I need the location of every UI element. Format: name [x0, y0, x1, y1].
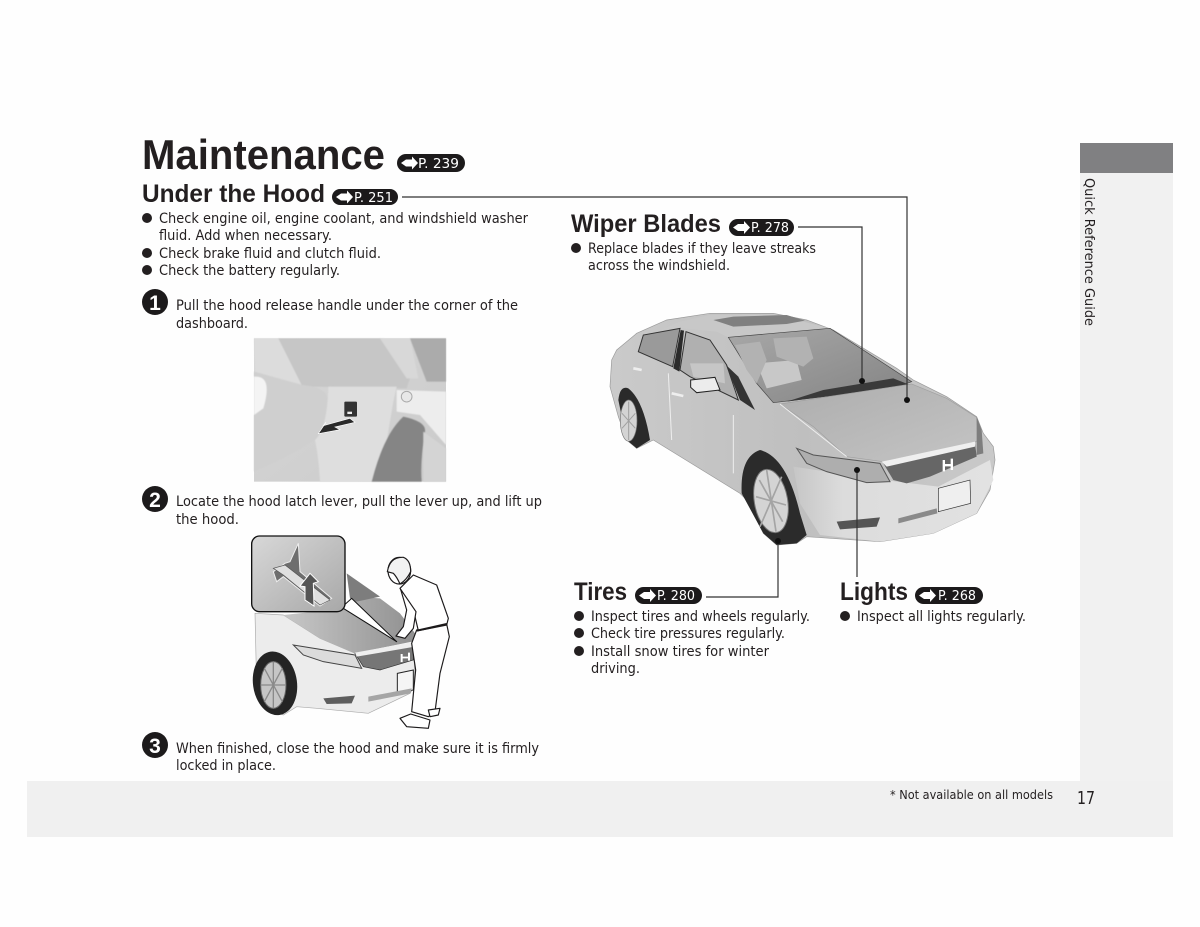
door seams	[668, 373, 847, 473]
under the hood bullet list: fluid. Add when necessary.	[159, 228, 332, 244]
car body	[610, 313, 995, 545]
heading: Tires: Tires	[574, 578, 627, 606]
windshield	[728, 328, 912, 403]
step 2: the hood.	[176, 512, 239, 528]
illustration: hood release handle	[254, 338, 446, 482]
sidebar grey tab	[1080, 143, 1173, 173]
leader: under the hood to hood	[402, 197, 910, 403]
heading: Lights: Lights	[840, 578, 908, 606]
heading: Wiper Blades: Wiper Blades	[571, 210, 721, 238]
leader: wiper blades	[798, 227, 865, 384]
step 1	[142, 289, 518, 332]
step 2	[142, 486, 542, 528]
page reference pill P. 251: P. 251	[354, 191, 393, 206]
front bumper	[793, 460, 993, 542]
door mirror	[691, 377, 720, 393]
tires bullet list	[574, 609, 810, 677]
under the hood bullet list: Check the battery regularly.	[159, 263, 340, 279]
under the hood bullet list	[142, 211, 528, 279]
illustration: car three-quarter view	[610, 313, 995, 545]
page reference pill P. 268: P. 268	[938, 589, 976, 604]
bottom footer band	[27, 781, 1173, 837]
roof and sunroof	[642, 314, 830, 338]
tires bullet list: Inspect tires and wheels regularly.	[591, 609, 810, 625]
leader: tires	[706, 538, 781, 597]
wiper blades bullet list: Replace blades if they leave streaks	[588, 241, 816, 257]
heading: Under the Hood: Under the Hood	[142, 180, 325, 208]
person	[387, 557, 449, 728]
footnote: * Not available on all models	[890, 788, 1053, 802]
wiper blades bullet list: across the windshield.	[588, 258, 730, 274]
step 1: Pull the hood release handle under the corner of the	[176, 298, 518, 314]
step 3	[142, 732, 539, 774]
step 2: Locate the hood latch lever, pull the lever up, and lift up	[176, 494, 542, 510]
page reference pill P. 239: P. 239	[418, 157, 459, 172]
wiper blades bullet list	[571, 241, 816, 274]
page reference pill P. 278: P. 278	[751, 221, 789, 236]
page reference pill P. 268	[915, 587, 983, 604]
tires bullet list: Install snow tires for winter	[591, 644, 769, 660]
lower grille	[898, 508, 937, 523]
step 3: locked in place.	[176, 758, 276, 774]
grille	[882, 442, 977, 483]
page reference pill P. 280	[635, 587, 702, 604]
side windows	[638, 328, 755, 410]
leader from inset to latch	[342, 598, 397, 642]
number plate	[938, 480, 971, 512]
under the hood bullet list: Check brake fluid and clutch fluid.	[159, 246, 381, 262]
step 3: When finished, close the hood and make sure it is firmly	[176, 741, 539, 757]
tires bullet list: Check tire pressures regularly.	[591, 626, 785, 642]
rear wheel	[618, 388, 650, 448]
right sidebar band	[1080, 143, 1173, 783]
lights bullet list: Inspect all lights regularly.	[857, 609, 1026, 625]
page reference pill P. 239	[397, 154, 465, 172]
step 3: 3	[149, 735, 161, 758]
under the hood bullet list: Check engine oil, engine coolant, and windshield washer	[159, 211, 528, 227]
step 1: 1	[149, 292, 161, 315]
step 1: dashboard.	[176, 316, 248, 332]
page reference pill P. 251	[332, 189, 398, 206]
leader: lights	[854, 467, 860, 577]
hood	[780, 384, 978, 462]
headlamp	[797, 448, 890, 483]
sidebar label: Quick Reference Guide	[1081, 178, 1097, 326]
title: Maintenance: Maintenance	[142, 131, 385, 178]
page reference pill P. 280: P. 280	[657, 589, 695, 604]
page reference pill P. 278	[729, 219, 794, 236]
fog lamp	[837, 517, 880, 529]
right edge lamp	[977, 417, 983, 455]
door handles	[633, 368, 683, 396]
tires bullet list: driving.	[591, 661, 640, 677]
inset: hood latch lever	[252, 536, 345, 612]
car front	[249, 573, 420, 718]
step 2: 2	[149, 489, 161, 512]
page number: 17	[1077, 788, 1095, 809]
illustration: person lifting hood with inset	[249, 536, 449, 728]
front wheel	[742, 450, 807, 545]
